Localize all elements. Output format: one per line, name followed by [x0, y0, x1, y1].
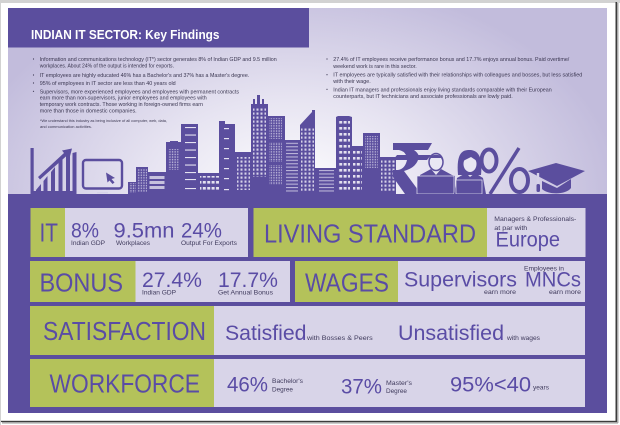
panel: satisfaction: SATISFACTION [43, 316, 206, 346]
text block: right findings [326, 57, 582, 100]
panel: living standard: Europe [496, 229, 560, 252]
footnote [40, 119, 167, 129]
text block: right findings: with their wage. [332, 79, 371, 85]
footnote: and communication activities. [40, 125, 92, 129]
panel: IT: 8% [71, 219, 99, 242]
panel: workforce: years [533, 386, 549, 392]
skyline [128, 95, 396, 194]
panel: wages: earn more [549, 290, 582, 296]
panel: satisfaction [30, 306, 585, 355]
text block: left findings [33, 57, 277, 129]
footnote: *We understand this industry as being inclusive of all computer, web, data, [40, 119, 167, 123]
panel: workforce: 95%<40 [450, 374, 531, 397]
text block: right findings: weekend work is rare in this sector. [332, 64, 417, 70]
panel: wages: MNCs [525, 269, 581, 292]
panel: bonus: BONUS [40, 268, 123, 298]
panel: living standard: at par with [494, 226, 527, 232]
text block: right findings: IT employees are typically satisfied with their relationships with colleagues and bosses, but less satisfied [333, 73, 582, 79]
panel: IT: Workplaces [116, 241, 150, 247]
background gradient panel [8, 8, 607, 198]
text block: right findings: counterparts, but IT technicians and associate professionals are lowly paid. [333, 94, 513, 100]
icon: computer monitor with cursor [83, 160, 122, 193]
text block: left findings: earn more than non-supervisors, junior employees and employees with [40, 96, 207, 102]
panel: workforce: 46% [227, 374, 268, 397]
text block: right findings: 27.4% of IT employees receive performance bonus and 17.7% enjoys annual bonus. Paid overtime/ [333, 57, 570, 63]
panel: workforce [30, 359, 585, 407]
panel: wages: earn more [484, 290, 517, 296]
icon: businessman at laptop [417, 154, 455, 194]
panel: bonus [30, 261, 290, 302]
text block: left findings: Supervisors, more experienced employees and employees with permanent contracts [40, 89, 239, 95]
panel: IT: 9.5mn [114, 219, 174, 242]
text block: left findings: workplaces. About 24% of the output is intended for exports. [39, 64, 174, 70]
icon: percent sign [482, 148, 528, 194]
panel: workforce: Degree [386, 389, 408, 395]
panel: bonus: Indian GDP [142, 290, 176, 296]
title: INDIAN IT SECTOR: Key Findings [31, 27, 220, 42]
panel: IT [30, 208, 248, 257]
panel: wages: Employees in [524, 266, 564, 272]
icon: growth bar chart [30, 148, 76, 194]
building windows [129, 107, 395, 193]
panel: bonus: 27.4% [142, 269, 202, 292]
header band [8, 8, 309, 48]
panel: satisfaction: with Bosses & Peers [306, 336, 373, 342]
text block: left findings: more than those in domestic companies. [40, 109, 137, 115]
panel: IT: IT [40, 218, 58, 248]
panel: workforce: Master's [386, 381, 412, 387]
panel: satisfaction: Satisfied [225, 322, 306, 345]
panel: workforce: Degree [272, 388, 294, 394]
panel: wages [295, 261, 585, 302]
panel: wages: WAGES [305, 268, 389, 298]
panel: bonus: Get Annual Bonus [218, 290, 273, 296]
text block: left findings: 95% of employees in IT sector are less than 40 years old [40, 81, 176, 87]
panel: wages: Supervisors [404, 269, 517, 292]
panel: IT: 24% [181, 219, 222, 242]
panel: living standard: Managers & Professionals- [494, 217, 576, 223]
panel: workforce: Bachelor's [272, 379, 303, 385]
icon: woman with headset at laptop [454, 150, 486, 194]
icon: rupee symbol [393, 143, 432, 194]
panel: satisfaction: with wages [506, 336, 540, 342]
panel: workforce: WORKFORCE [50, 369, 200, 399]
panel: IT: Indian GDP [71, 241, 105, 247]
panel: IT: Output For Exports [181, 241, 237, 247]
icon: graduation cap [528, 163, 585, 193]
panel: satisfaction: Unsatisfied [398, 322, 504, 345]
panel: workforce: 37% [341, 375, 382, 398]
panel: living standard: LIVING STANDARD [264, 219, 476, 249]
lower purple band [8, 194, 607, 413]
text block: left findings: IT employees are highly educated 46% has a Bachelor's and 37% has a Master's degree. [40, 73, 250, 79]
text block: right findings: Indian IT managers and professionals enjoy living standards comparable with their European [333, 87, 552, 93]
text block: left findings: Information and communications technology (IT*) sector generates 8% of Indian GDP and 9.5 million [40, 57, 277, 63]
text block: left findings: temporary work contracts. Those working in foreign-owned firms earn [40, 102, 203, 108]
panel: bonus: 17.7% [218, 269, 278, 292]
panel: living standard [254, 208, 586, 257]
